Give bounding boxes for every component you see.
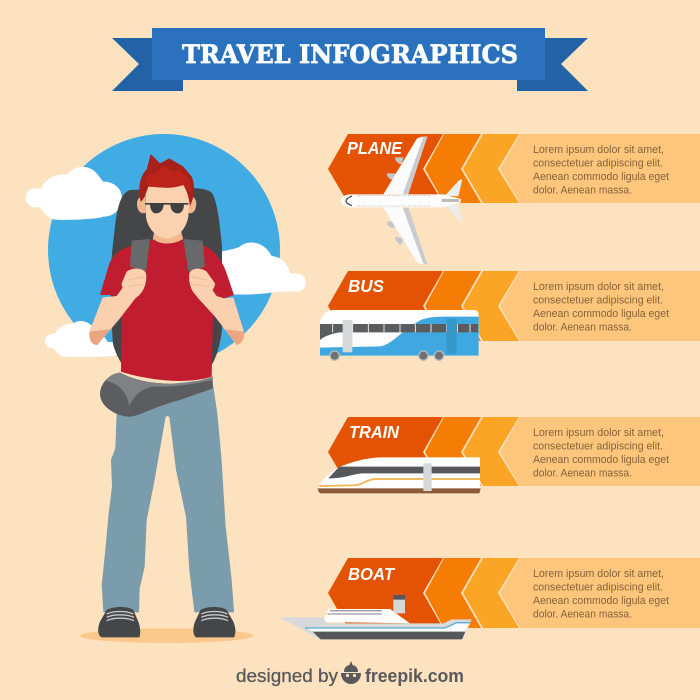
dark keel bbox=[313, 632, 465, 639]
waist bag bbox=[100, 373, 213, 417]
hair shading bbox=[146, 166, 192, 193]
description text: dolor. Aenean massa. bbox=[533, 608, 632, 620]
description text: dolor. Aenean massa. bbox=[533, 468, 632, 480]
cabin stripes bbox=[327, 611, 382, 614]
row: bus bbox=[328, 271, 700, 341]
blue livery bbox=[320, 317, 479, 356]
window row bbox=[357, 196, 430, 206]
right arm shade bbox=[225, 329, 244, 345]
person upper body bbox=[89, 154, 244, 381]
clouds bbox=[25, 167, 306, 357]
description text: dolor. Aenean massa. bbox=[533, 322, 632, 334]
red t-shirt bbox=[100, 239, 234, 381]
description text: consectetuer adipiscing elit. bbox=[533, 440, 663, 452]
engines bbox=[387, 157, 403, 244]
ribbon body bbox=[152, 28, 545, 80]
fingers bbox=[128, 277, 207, 287]
tail fins bbox=[445, 179, 462, 222]
description text: Aenean commodo ligula eget bbox=[533, 171, 669, 183]
row: plane bbox=[328, 134, 700, 203]
person legs bbox=[80, 380, 253, 643]
description text: Aenean commodo ligula eget bbox=[533, 308, 669, 320]
chevron arrows bbox=[328, 558, 700, 628]
trousers bbox=[102, 380, 233, 612]
chevron arrows bbox=[328, 417, 700, 486]
cabin bbox=[323, 609, 410, 623]
backpack bbox=[111, 188, 222, 367]
row: boat bbox=[328, 558, 700, 628]
funnel bbox=[393, 598, 405, 613]
neck and ears bbox=[137, 196, 196, 244]
description text: Aenean commodo ligula eget bbox=[533, 595, 669, 607]
left arm bbox=[89, 287, 137, 345]
sunglasses bbox=[145, 203, 188, 213]
right arm bbox=[197, 287, 244, 345]
traveller illustration with sky bbox=[25, 134, 306, 643]
title banner bbox=[112, 28, 588, 91]
backpack straps bbox=[130, 239, 205, 272]
bus body bbox=[320, 310, 479, 356]
bag body bbox=[100, 373, 213, 417]
label: PLANE bbox=[347, 138, 403, 158]
icon: boat bbox=[279, 595, 472, 639]
title text: TRAVEL INFOGRAPHICS bbox=[182, 40, 518, 70]
window band bbox=[320, 324, 478, 340]
icon: bus bbox=[320, 310, 479, 360]
footer credit bbox=[236, 661, 464, 686]
funnel cap bbox=[393, 595, 405, 600]
fuselage bbox=[341, 194, 461, 207]
white hull band bbox=[307, 623, 470, 632]
hair bbox=[139, 154, 194, 206]
description text: Lorem ipsum dolor sit amet, bbox=[533, 427, 664, 439]
brown base bbox=[318, 488, 481, 493]
chevron arrows bbox=[328, 271, 700, 341]
cockpit bbox=[346, 196, 352, 206]
description text: Lorem ipsum dolor sit amet, bbox=[533, 144, 664, 156]
icon: freepik mascot bbox=[341, 661, 361, 684]
wheels bbox=[330, 351, 444, 360]
left arm shade bbox=[89, 329, 111, 345]
chevron arrows bbox=[328, 134, 700, 203]
blue stripe bbox=[305, 623, 470, 628]
rear door bbox=[447, 318, 457, 354]
tail stabiliser bbox=[442, 199, 459, 202]
row: train bbox=[328, 417, 700, 486]
yellow stripe bbox=[319, 479, 480, 486]
description text: Aenean commodo ligula eget bbox=[533, 454, 669, 466]
description text: dolor. Aenean massa. bbox=[533, 184, 632, 196]
description text: consectetuer adipiscing elit. bbox=[533, 294, 663, 306]
description text: Lorem ipsum dolor sit amet, bbox=[533, 281, 664, 293]
ground shadow bbox=[80, 628, 253, 643]
train body bbox=[318, 457, 480, 488]
door bbox=[343, 320, 352, 352]
dark window band bbox=[328, 467, 480, 478]
sky circle bbox=[48, 134, 280, 366]
label: BUS bbox=[348, 276, 384, 296]
shoe laces bbox=[107, 611, 228, 621]
right shoe bbox=[193, 607, 235, 637]
wing shading bbox=[403, 137, 427, 264]
left shoe bbox=[98, 607, 140, 637]
description text: consectetuer adipiscing elit. bbox=[533, 158, 663, 170]
face bbox=[145, 183, 190, 238]
designed by: designed by bbox=[236, 666, 338, 686]
description text: consectetuer adipiscing elit. bbox=[533, 582, 663, 594]
bag top highlight bbox=[106, 373, 213, 406]
label: TRAIN bbox=[349, 422, 399, 442]
icon: plane bbox=[341, 137, 462, 264]
hull bbox=[279, 617, 472, 639]
door bbox=[423, 463, 432, 491]
label: BOAT bbox=[348, 564, 395, 584]
window dividers bbox=[333, 324, 470, 332]
wings bbox=[383, 137, 427, 264]
icon: train bbox=[318, 457, 481, 493]
right hand bbox=[189, 269, 215, 298]
description text: Lorem ipsum dolor sit amet, bbox=[533, 568, 664, 580]
ribbon tails bbox=[112, 38, 588, 91]
left hand bbox=[122, 269, 146, 298]
freepik.com: freepik.com bbox=[365, 666, 464, 686]
